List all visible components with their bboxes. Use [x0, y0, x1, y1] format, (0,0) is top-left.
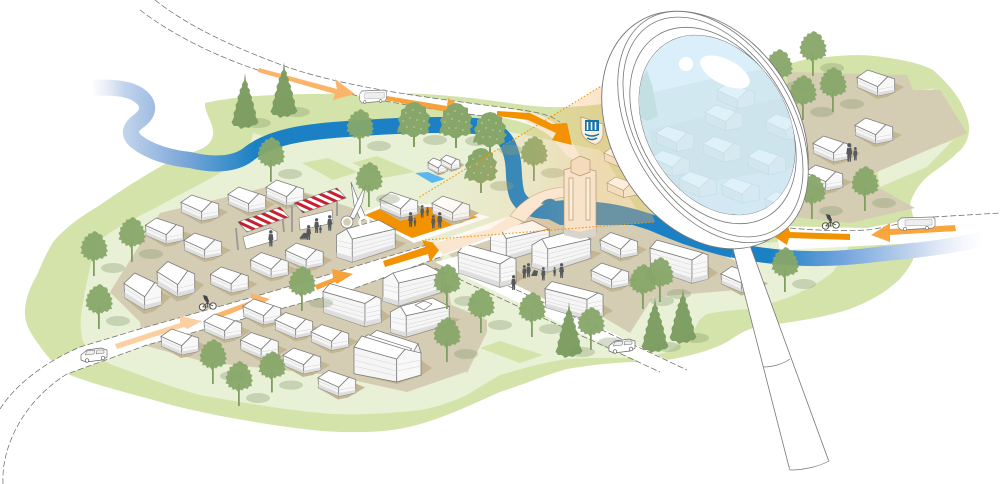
pale house	[656, 126, 694, 152]
person	[511, 275, 516, 290]
long building	[545, 282, 613, 321]
house	[123, 273, 171, 314]
tree	[80, 231, 125, 276]
tower windows	[569, 178, 590, 220]
house	[282, 348, 330, 377]
orange plaza	[360, 204, 490, 243]
tower base	[564, 228, 596, 239]
house	[227, 187, 275, 216]
stall counter	[243, 228, 277, 249]
van	[81, 348, 107, 362]
bus right road	[898, 217, 935, 231]
tree	[766, 49, 810, 94]
person	[420, 205, 424, 218]
trees lower right	[518, 247, 816, 358]
tree	[434, 264, 478, 309]
tower	[564, 156, 596, 239]
house	[599, 232, 647, 262]
small shed	[440, 155, 464, 172]
tree	[790, 75, 834, 120]
house	[183, 233, 231, 262]
glare ellipse	[700, 56, 750, 88]
tree	[258, 137, 302, 182]
house	[284, 243, 332, 272]
person	[541, 267, 546, 280]
brown ground centre	[443, 210, 745, 333]
lens ring	[586, 0, 840, 269]
house	[203, 314, 251, 343]
stall pole	[292, 190, 337, 232]
long building	[383, 264, 453, 307]
tree	[226, 361, 270, 406]
peach houses beside tower	[604, 147, 637, 198]
person	[426, 207, 429, 216]
arrow	[385, 96, 460, 112]
arrow	[767, 224, 850, 245]
pine	[232, 73, 271, 129]
house	[804, 165, 852, 194]
house	[274, 312, 322, 342]
handle cap	[789, 459, 829, 470]
ground band	[639, 69, 795, 215]
arrows on roads	[115, 68, 956, 349]
house	[720, 266, 768, 296]
pine	[642, 297, 681, 353]
person	[853, 147, 858, 160]
arrow	[383, 240, 443, 267]
people on orange plaza	[408, 205, 442, 228]
apple tree	[464, 148, 514, 193]
tree	[630, 264, 674, 309]
person	[526, 263, 531, 277]
tree	[800, 31, 844, 76]
customers	[300, 215, 332, 240]
buildings centre	[458, 220, 768, 321]
house	[317, 370, 365, 400]
trees right	[766, 31, 896, 219]
scissors sculpture	[341, 182, 368, 228]
house	[604, 147, 634, 168]
bridge	[510, 187, 566, 222]
tree	[434, 317, 478, 362]
long building	[458, 244, 526, 288]
tree	[852, 166, 896, 211]
handle seam	[763, 359, 790, 367]
ground lower	[652, 97, 795, 215]
pale house	[703, 136, 741, 162]
coat of arms shield	[581, 117, 603, 144]
person	[846, 143, 852, 162]
road right	[775, 211, 1000, 250]
person	[431, 215, 436, 228]
car lower road	[609, 339, 635, 353]
apple tree	[439, 103, 489, 148]
long building	[532, 230, 602, 273]
pale house	[765, 114, 794, 140]
river upper with left fade	[93, 88, 733, 250]
tree	[518, 292, 563, 337]
stroller	[531, 270, 538, 276]
house	[812, 136, 860, 165]
magnified view cone	[418, 85, 655, 240]
striped awning	[238, 207, 289, 232]
tree	[356, 162, 400, 207]
person	[408, 212, 413, 227]
tree	[520, 136, 565, 181]
foot band	[678, 168, 793, 215]
pale house	[705, 105, 743, 131]
apple tree	[397, 102, 447, 147]
house	[854, 118, 902, 147]
peach tinted road to tower	[433, 216, 522, 255]
people group centre	[511, 263, 564, 290]
glass	[607, 7, 827, 243]
tree	[820, 67, 864, 112]
long building	[650, 240, 718, 284]
brown ground right	[787, 72, 967, 223]
tree	[118, 217, 163, 262]
pale house	[679, 172, 717, 197]
tree	[346, 109, 391, 154]
long building	[490, 220, 560, 261]
house	[144, 218, 192, 247]
lens front rim	[578, 0, 848, 277]
tower top	[571, 156, 590, 176]
pale house	[748, 149, 786, 175]
long building with skylights	[390, 298, 460, 338]
tree	[468, 288, 512, 333]
small outbuildings	[428, 155, 464, 175]
plaza house	[431, 196, 479, 225]
house	[590, 263, 638, 292]
tree	[288, 266, 333, 311]
trees left and centre	[80, 102, 565, 406]
brown ground left	[110, 187, 465, 392]
tree	[772, 247, 816, 292]
magnifier lens	[601, 10, 809, 250]
bus top road	[360, 90, 386, 104]
pale house	[717, 83, 755, 109]
person	[437, 212, 442, 228]
arrow	[258, 68, 355, 100]
houses right	[804, 70, 904, 194]
cyclist right	[822, 214, 839, 229]
plaza house	[379, 192, 427, 221]
house	[210, 267, 258, 296]
pale house	[722, 178, 759, 203]
dotted cone lines	[418, 85, 655, 240]
cyclist	[199, 295, 216, 310]
blue pool	[415, 172, 445, 183]
glare dot	[679, 57, 693, 71]
house	[607, 177, 637, 198]
tower shaft	[564, 166, 596, 235]
main road	[0, 216, 525, 484]
road top	[140, 0, 585, 170]
road lower right	[435, 256, 687, 372]
arrow	[871, 223, 956, 242]
stall pole	[236, 212, 284, 250]
arrow	[115, 316, 202, 349]
light inner land	[81, 129, 850, 414]
curved bright arrow	[497, 111, 572, 145]
person	[553, 267, 556, 276]
vehicles	[81, 90, 935, 362]
right light strips	[877, 88, 953, 187]
arrow	[315, 269, 353, 290]
lens back rim	[560, 0, 850, 287]
striped awning	[294, 188, 346, 213]
view through glass	[639, 35, 795, 215]
pond by bridge	[530, 200, 650, 225]
pale pine	[638, 70, 658, 121]
people right	[846, 143, 858, 162]
pale house	[764, 191, 782, 208]
tree	[798, 174, 843, 219]
house	[310, 324, 358, 354]
arrow	[215, 293, 270, 319]
house	[160, 329, 208, 358]
pine	[556, 302, 595, 358]
house	[180, 195, 228, 224]
house	[242, 299, 290, 328]
factory with sawtooth roof	[354, 330, 432, 384]
stall counter	[299, 210, 333, 230]
house	[265, 180, 313, 209]
brown ground lower patch	[440, 300, 487, 373]
green outer land	[25, 55, 969, 432]
house	[250, 252, 298, 282]
tree	[578, 307, 622, 350]
long building	[336, 220, 406, 263]
market stall right	[292, 188, 346, 240]
pine	[670, 288, 709, 344]
tree	[86, 284, 130, 329]
tree	[200, 339, 244, 384]
person	[414, 218, 416, 226]
pale house	[652, 150, 689, 176]
magnifier handle	[733, 240, 829, 470]
person	[522, 265, 526, 278]
pine	[270, 62, 310, 118]
buildings left cluster	[123, 180, 479, 400]
river right fade	[733, 238, 985, 259]
sky band	[639, 35, 788, 110]
person	[559, 263, 564, 278]
house	[856, 70, 904, 99]
market stall left	[236, 207, 289, 250]
field patches	[302, 156, 543, 363]
house	[156, 262, 204, 302]
vendor	[268, 230, 274, 246]
peach road curve	[525, 112, 583, 165]
house	[240, 332, 288, 362]
pines top left	[232, 62, 310, 129]
long building	[323, 284, 391, 328]
tree	[646, 257, 691, 302]
apple tree	[473, 112, 523, 157]
small shed	[428, 158, 452, 175]
tree	[258, 351, 303, 392]
lens inner ring	[596, 0, 830, 254]
